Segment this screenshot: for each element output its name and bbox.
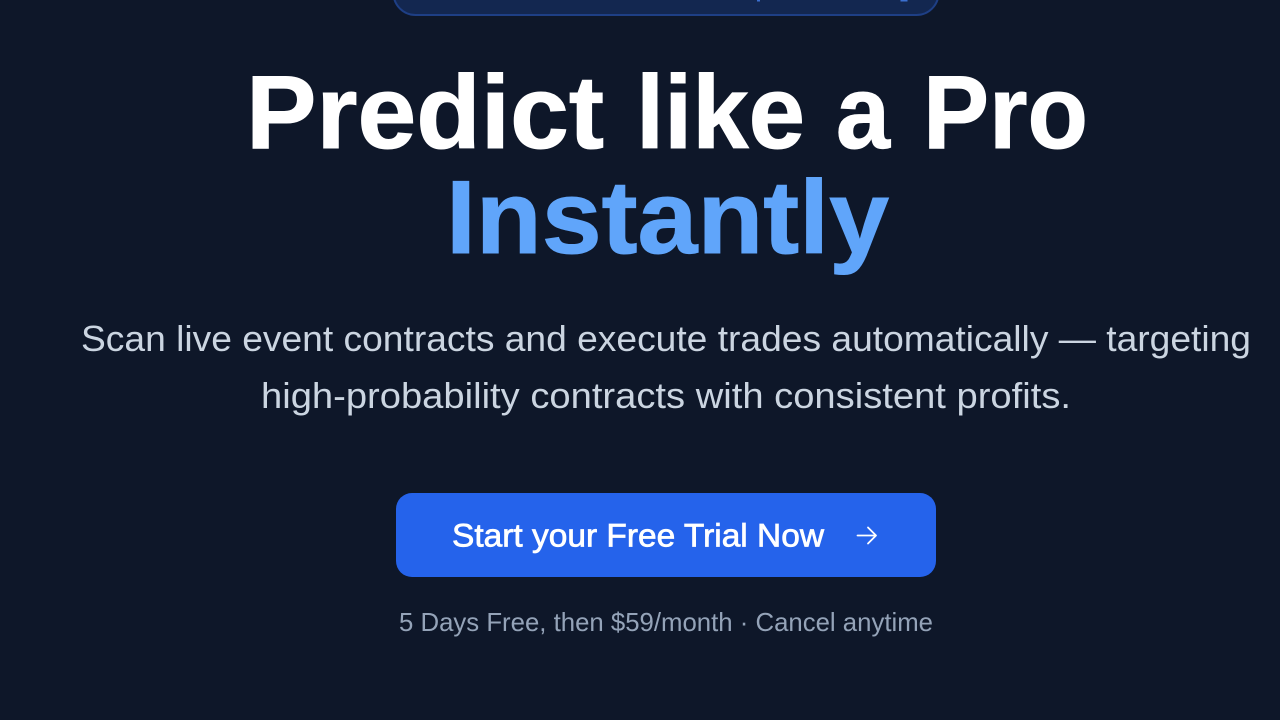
title: first line: Predict <box>246 55 604 171</box>
title: first line: Pro <box>923 55 1088 171</box>
title: first line <box>246 55 1088 171</box>
title: first line: a <box>836 55 891 171</box>
call-to-action button: Start your Free Trial Now <box>452 518 825 554</box>
subtitle text <box>81 318 1251 416</box>
title: first line: like <box>636 55 805 171</box>
subtitle text: high-probability contracts with consistent profits. <box>261 375 1071 416</box>
title: second line: Instantly <box>446 160 889 276</box>
subtitle text: Scan live event contracts and execute trades automatically — targeting <box>81 318 1251 359</box>
badge: top pill cut off by the page edge <box>394 0 938 15</box>
call-to-action button <box>396 493 936 577</box>
icon: arrow <box>858 528 876 544</box>
pricing note: 5 Days Free, then $59/month · Cancel anytime <box>399 607 933 637</box>
